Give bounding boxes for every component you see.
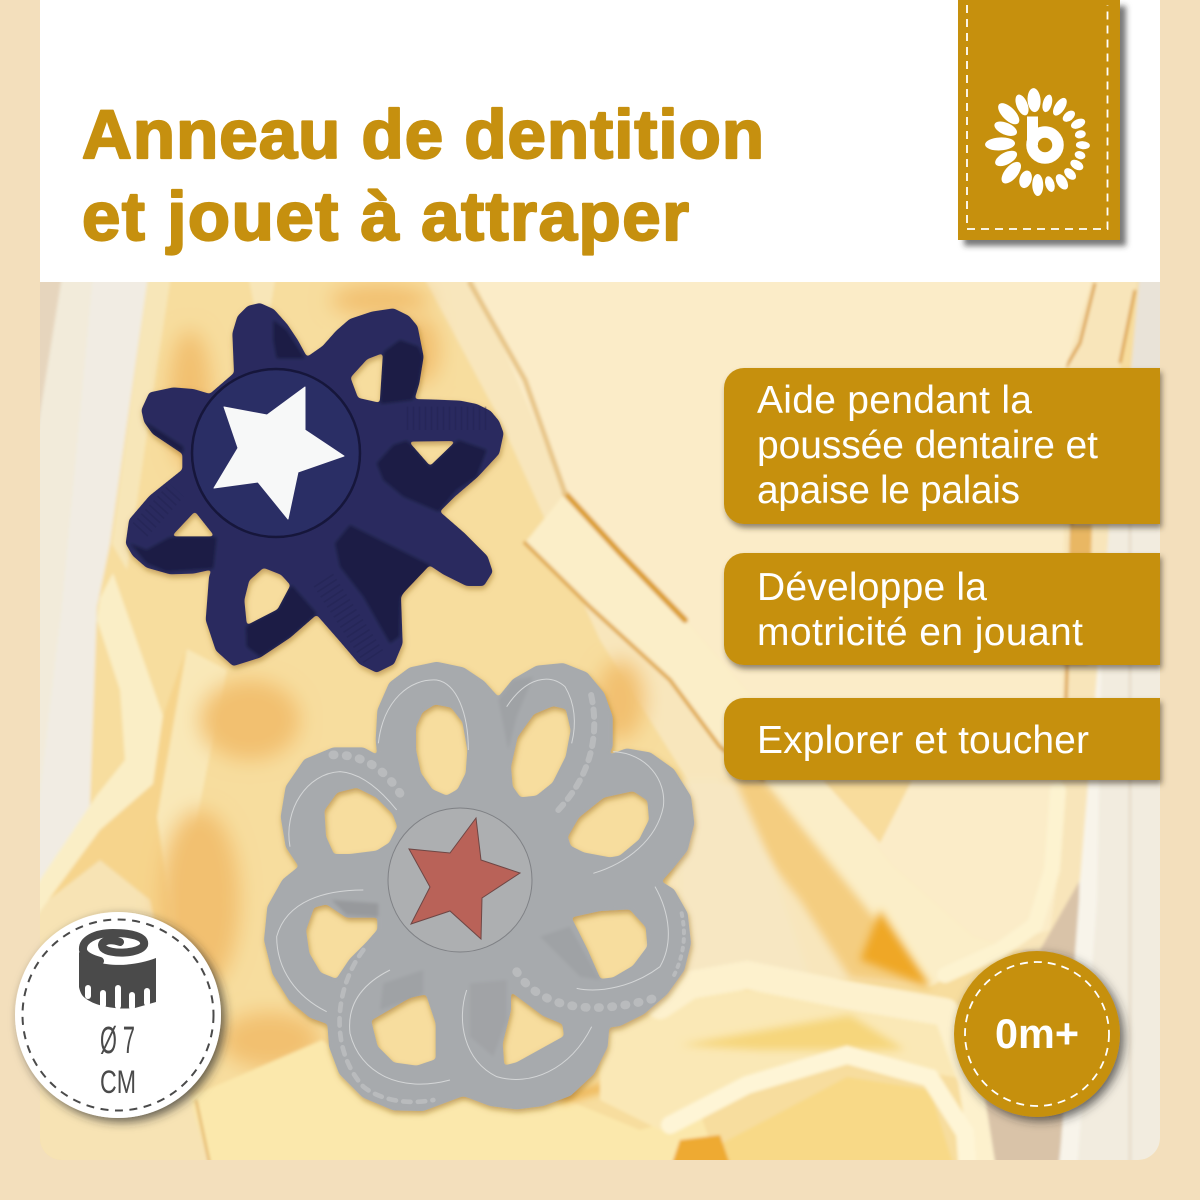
size text: Ø 7 [100,1020,135,1062]
left of strip: cream [420,270,930,987]
benefit panel: motor skills: motricité en jouant [757,611,1083,654]
benefit panel: teething [724,368,1160,524]
highlight seams [277,679,668,1084]
ribbed texture [140,418,487,657]
red star [409,818,520,939]
lower right folds [600,985,973,1130]
benefit panel: teething: Aide pendant la [757,379,1032,422]
right box wall [1129,282,1160,368]
photo: yellow muslin fabric in a box [40,282,1160,1160]
benefit panel: teething: apaise le palais [757,469,1020,512]
ribs on grey teether [330,690,684,1102]
left box wall [40,282,62,416]
age badge: 0m+ [995,1010,1079,1057]
title: Anneau de dentition [82,96,764,173]
header panel [40,0,1160,282]
orange creases [470,283,763,780]
pale diagonal strip [525,493,1000,987]
photo: grey star teether [265,663,693,1110]
logo: sunflower b [985,88,1090,196]
benefit panel: explore: Explorer et toucher [757,719,1089,762]
navy central hub [192,369,360,537]
size badge [15,912,221,1118]
benefit panel: explore [724,698,1160,780]
darker back parts [332,677,600,1057]
navy silhouette with holes [127,304,503,672]
age badge [954,951,1120,1117]
bottom pale fold [190,1040,720,1170]
brand tag with logo [958,0,1120,240]
size text [100,1020,136,1100]
benefit panel: motor skills: Développe la [757,566,987,609]
orange wedge near hem [723,780,930,987]
size text: CM [100,1064,136,1100]
white star [214,387,344,519]
upper right pale panel [470,270,1095,945]
title: et jouet à attraper [82,178,689,255]
photo: navy star teether [127,304,503,672]
grey central hub [388,808,532,952]
grey silhouette with holes [265,663,693,1110]
right fabric hem [1016,282,1138,951]
benefit panel: motor skills [724,553,1160,665]
dark back straps [130,320,487,657]
title [82,96,764,255]
benefit panel: teething: poussée dentaire et [757,424,1098,467]
soft orange patches [160,284,644,1068]
icon: measuring tape [79,933,156,1010]
left fabric folds [112,270,172,570]
